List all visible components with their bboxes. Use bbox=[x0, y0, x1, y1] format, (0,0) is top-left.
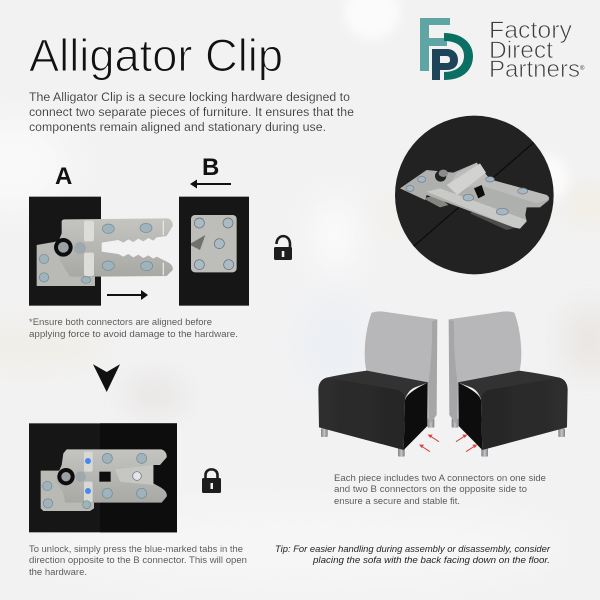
locked hardware bbox=[41, 449, 167, 511]
intro text: connect two separate pieces of furniture. It ensures that the bbox=[29, 107, 354, 119]
caption: connectors per piece: ensure a secure and stable fit. bbox=[334, 496, 460, 507]
icon: closed padlock bbox=[202, 469, 221, 493]
caption: connectors per piece: Each piece includes two A connectors on one side bbox=[334, 473, 546, 484]
logo wordmark: Partners bbox=[489, 56, 580, 83]
connector A hardware bbox=[37, 218, 173, 286]
photo: two sofa chairs bbox=[318, 311, 568, 457]
red connector arrows bbox=[419, 435, 477, 452]
label B with left arrow: B bbox=[202, 154, 219, 181]
logo wordmark: ® bbox=[580, 65, 585, 72]
logo wordmark bbox=[489, 17, 585, 83]
blue tab markers bbox=[85, 458, 91, 464]
label A: A bbox=[55, 163, 72, 190]
photo: circular close-up of clip bbox=[395, 116, 554, 274]
caption: unlock instructions: To unlock, simply press the blue-marked tabs in the bbox=[29, 544, 243, 555]
title: Alligator Clip bbox=[29, 30, 283, 81]
connector B hardware bbox=[191, 215, 237, 272]
icon: open padlock bbox=[274, 236, 292, 260]
right chair bbox=[449, 311, 568, 457]
photo: connectors locked together bbox=[29, 423, 177, 532]
intro text: The Alligator Clip is a secure locking hardware designed to bbox=[29, 92, 350, 104]
caption: alignment note: *Ensure both connectors are aligned before bbox=[29, 317, 212, 328]
photo panel A bbox=[29, 197, 101, 306]
caption: unlock instructions: the hardware. bbox=[29, 567, 87, 578]
photo panel B bbox=[179, 197, 249, 306]
logo wordmark: Factory bbox=[489, 17, 572, 44]
caption: unlock instructions bbox=[29, 544, 247, 578]
chair feet bbox=[321, 418, 434, 457]
arrow: right bbox=[107, 290, 148, 300]
tip: Tip: For easier handling during assembly or disassembly, consider bbox=[275, 544, 551, 555]
arrow: down chevron bbox=[93, 364, 120, 392]
intro text bbox=[29, 92, 354, 134]
intro text: components remain aligned and stationary during use. bbox=[29, 122, 326, 134]
caption: alignment note bbox=[29, 317, 238, 340]
left chair bbox=[318, 311, 437, 457]
close-up hardware bbox=[400, 163, 549, 230]
caption: alignment note: applying force to avoid damage to the hardware. bbox=[29, 329, 238, 340]
icon: FDP monogram bbox=[420, 18, 473, 80]
caption: connectors per piece: and two B connectors on the opposite side to bbox=[334, 484, 527, 495]
logo wordmark: Direct bbox=[489, 37, 553, 64]
tip: placing the sofa with the back facing down on the floor. bbox=[312, 555, 550, 566]
photo: connector A and connector B separated bbox=[29, 197, 249, 306]
logo: Factory Direct Partners bbox=[420, 17, 585, 83]
tip bbox=[275, 544, 551, 566]
caption: unlock instructions: direction opposite to the B connector. This will open bbox=[29, 555, 247, 566]
label B with left arrow bbox=[190, 154, 231, 188]
caption: connectors per piece bbox=[334, 473, 546, 507]
